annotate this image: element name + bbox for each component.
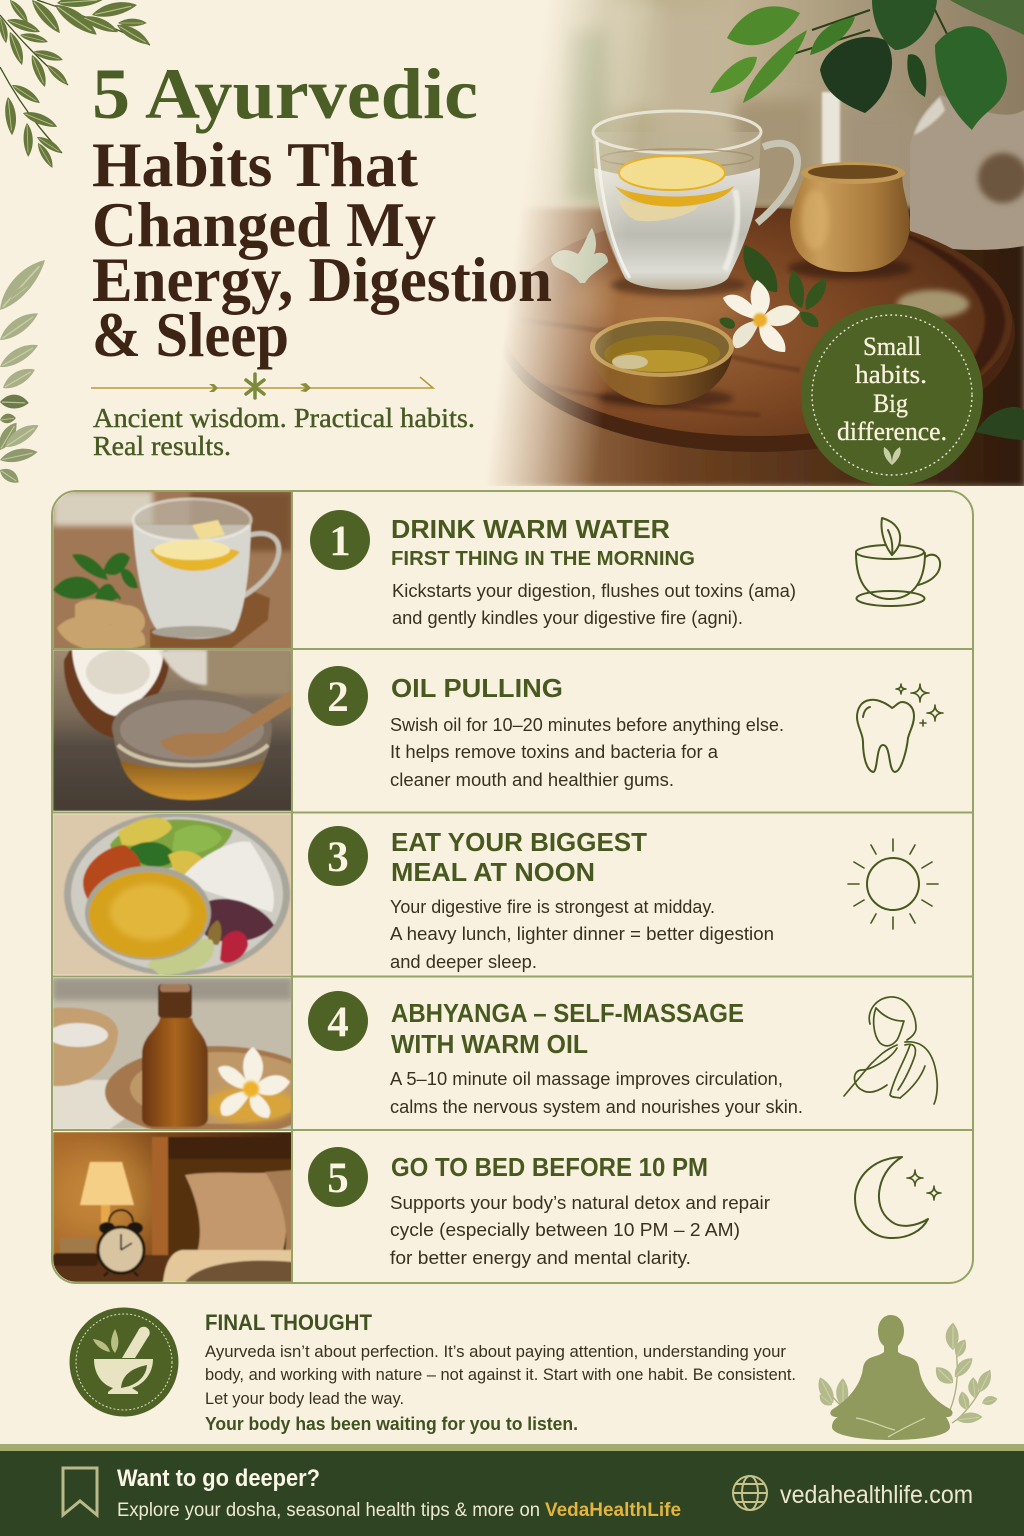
badge: small habits big difference: Small <box>863 332 921 361</box>
decorative leaves: lower left branch <box>0 253 51 487</box>
wooden tray <box>499 208 1015 452</box>
habit 2: OIL PULLING <box>391 673 563 703</box>
habit 4 <box>308 991 803 1117</box>
leaves and flower <box>551 228 826 352</box>
habit 5: GO TO BED BEFORE 10 PM <box>391 1152 708 1182</box>
icon: crescent moon with stars <box>855 1157 941 1238</box>
final thought text: Your body has been waiting for you to listen. <box>205 1414 578 1434</box>
footer call to action: Explore your dosha, seasonal health tips & more on <box>117 1499 540 1521</box>
footer call to action: Want to go deeper? <box>117 1465 320 1492</box>
photo: warm lemon water with ginger <box>53 491 292 651</box>
habit 1: and gently kindles your digestive fire (agni). <box>392 607 743 628</box>
title: Energy, Digestion <box>92 245 552 315</box>
final thought text <box>205 1310 796 1434</box>
brass pot <box>788 162 912 279</box>
habit 3 <box>308 826 774 972</box>
glass of lemon water <box>593 111 798 296</box>
footer call to action: VedaHealthLife <box>545 1499 681 1521</box>
subtitle <box>93 403 475 461</box>
habit 4: WITH WARM OIL <box>391 1029 588 1059</box>
title <box>92 54 552 370</box>
habit 3: EAT YOUR BIGGEST <box>391 827 647 857</box>
icon: mortar and pestle badge <box>70 1308 178 1416</box>
hero photo: tea tray <box>440 0 1024 486</box>
habit 1: 1 <box>329 518 351 565</box>
habit 3: Your digestive fire is strongest at midday. <box>390 896 715 917</box>
habit 3: and deeper sleep. <box>390 951 537 972</box>
subtitle: Real results. <box>93 431 231 461</box>
habit 2: It helps remove toxins and bacteria for a <box>390 741 719 762</box>
icon: teacup with leaf <box>856 518 940 606</box>
habit 1: Kickstarts your digestion, flushes out toxins (ama) <box>392 580 796 601</box>
title: Habits That <box>92 130 418 200</box>
decorative leaves: top left branch <box>0 0 153 170</box>
photo: amber oil bottle and flower <box>53 978 291 1129</box>
habit 2: cleaner mouth and healthier gums. <box>390 769 674 790</box>
habit 3: A heavy lunch, lighter dinner = better digestion <box>390 923 774 944</box>
icon: sun <box>848 839 938 929</box>
footer call to action <box>117 1465 681 1521</box>
table <box>440 208 1024 486</box>
habit 4: ABHYANGA – SELF-MASSAGE <box>391 998 744 1028</box>
photo: thali plate <box>53 812 292 976</box>
footer band <box>0 1444 1024 1536</box>
brass oil bowl <box>590 317 734 408</box>
final thought text: FINAL THOUGHT <box>205 1310 373 1335</box>
final thought text: body, and working with nature – not against it. Start with one habit. Be consistent. <box>205 1366 796 1384</box>
website link: vedahealthlife.com <box>780 1481 973 1509</box>
subtitle: Ancient wisdom. Practical habits. <box>93 403 475 433</box>
card: habits list <box>48 491 973 1283</box>
ornamental divider <box>91 374 433 398</box>
icon: bookmark <box>63 1468 97 1515</box>
title: 5 Ayurvedic <box>92 54 478 134</box>
habit 4: A 5–10 minute oil massage improves circulation, <box>390 1068 783 1089</box>
habit 1: FIRST THING IN THE MORNING <box>391 548 695 570</box>
habit 1 <box>310 510 796 628</box>
badge: small habits big difference: difference. <box>837 417 947 446</box>
badge: small habits big difference: Big <box>873 389 908 418</box>
final thought text: Let your body lead the way. <box>205 1390 404 1408</box>
seeds <box>897 290 969 318</box>
habit 2: Swish oil for 10–20 minutes before anything else. <box>390 714 784 735</box>
photo: bedside lamp and alarm clock <box>50 1132 292 1282</box>
final thought text: Ayurveda isn’t about perfection. It’s about paying attention, understanding your <box>205 1343 787 1361</box>
badge: small habits big difference <box>801 304 983 486</box>
photo: coconut and oil bowl <box>53 650 292 811</box>
habit 2 <box>308 666 784 790</box>
illustration: meditating silhouette with branches <box>814 1315 998 1440</box>
habit 3: MEAL AT NOON <box>391 857 595 887</box>
badge: small habits big difference: habits. <box>855 360 927 389</box>
habit 3: 3 <box>327 834 349 881</box>
title: & Sleep <box>92 300 289 370</box>
icon: self-massage figure <box>844 997 937 1104</box>
plant leaves <box>710 0 1024 130</box>
habit 5: cycle (especially between 10 PM – 2 AM) <box>390 1219 740 1240</box>
icon: sparkling tooth <box>857 684 943 772</box>
habit 2: 2 <box>327 674 349 721</box>
habit 4: calms the nervous system and nourishes your skin. <box>390 1096 803 1117</box>
habit 5 <box>308 1147 770 1268</box>
icon: globe <box>733 1476 767 1510</box>
habit 5: 5 <box>327 1155 349 1202</box>
title: Changed My <box>92 190 436 260</box>
habit 5: Supports your body’s natural detox and repair <box>390 1192 770 1213</box>
vase <box>910 95 1024 250</box>
habit 1: DRINK WARM WATER <box>391 514 670 544</box>
habit 4: 4 <box>327 999 349 1046</box>
habit 5: for better energy and mental clarity. <box>390 1247 691 1268</box>
